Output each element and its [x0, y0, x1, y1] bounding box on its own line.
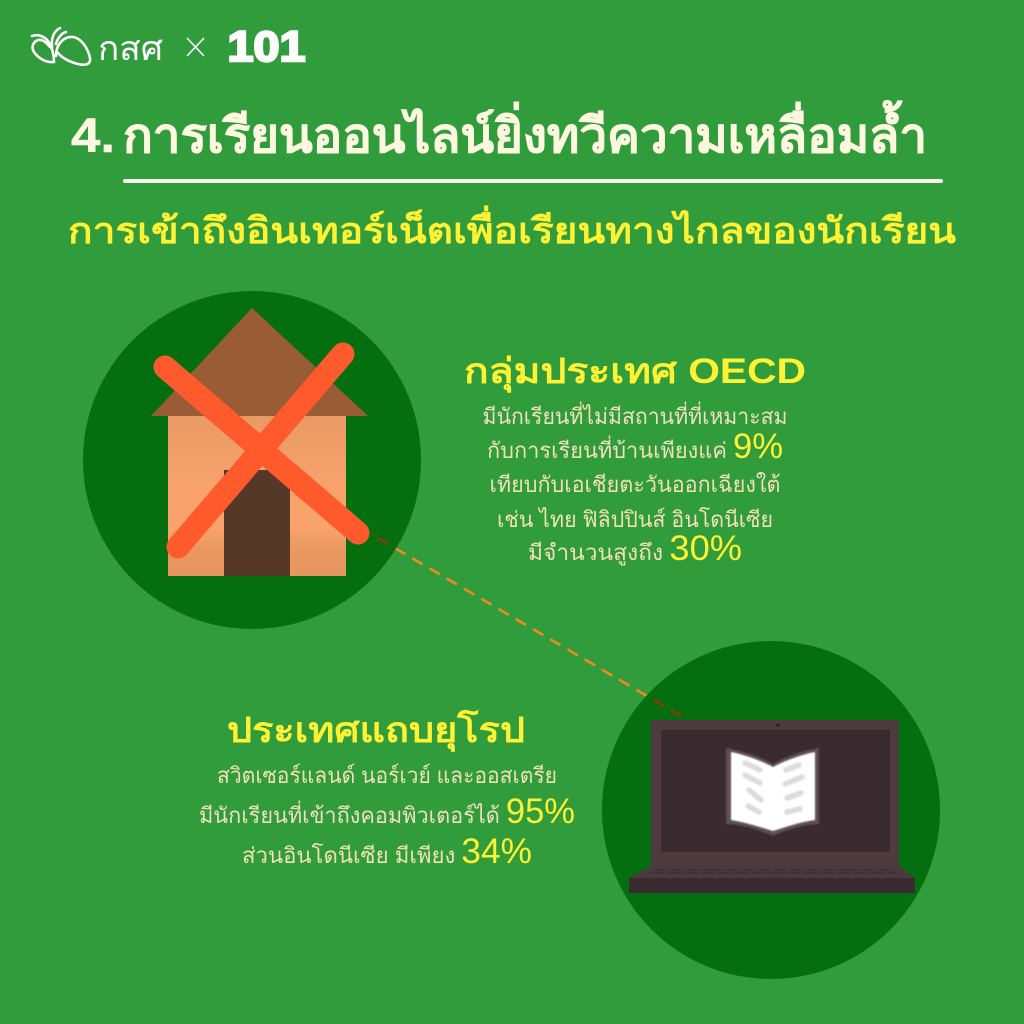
text block: OECD — [464, 352, 806, 568]
heading: OECD: กลุ่มประเทศ OECD — [464, 352, 806, 393]
logo text: กสศ — [98, 30, 163, 68]
logo: partner logos — [32, 23, 306, 71]
icon: times sign — [187, 38, 204, 56]
icon: red cross — [165, 354, 358, 547]
logo number 101: 101 — [228, 23, 306, 71]
body: OECD line 4: เช่น ไทย ฟิลิปปินส์ อินโดนีเซีย — [497, 507, 773, 532]
title number: 4. — [71, 110, 115, 163]
body: OECD line 2: กับการเรียนที่บ้านเพียงแค่ 9% — [487, 427, 783, 466]
icon: open book — [726, 748, 819, 836]
heading: Europe: ประเทศแถบยุโรป — [227, 709, 525, 752]
circle background — [602, 641, 940, 979]
title underline — [123, 179, 943, 183]
panel: laptop circle — [602, 641, 940, 979]
panel: house circle — [83, 291, 421, 629]
body: Europe line 3: ส่วนอินโดนีเซีย มีเพียง 34% — [242, 832, 532, 871]
title — [71, 100, 927, 163]
text block: Europe — [199, 709, 575, 871]
title text: การเรียนออนไลน์ยิ่งทวีความเหลื่อมล้ำ — [123, 100, 927, 163]
icon: leaf logo — [32, 28, 90, 65]
subtitle: การเข้าถึงอินเทอร์เน็ตเพื่อเรียนทางไกลของนักเรียน — [68, 205, 956, 251]
body: OECD line 1: มีนักเรียนที่ไม่มีสถานที่ที่เหมาะสม — [482, 401, 788, 429]
body: OECD line 5: มีจำนวนสูงถึง 30% — [528, 529, 742, 568]
body: Europe line 2: มีนักเรียนที่เข้าถึงคอมพิวเตอร์ได้ 95% — [199, 792, 575, 831]
circle background — [83, 291, 421, 629]
body: Europe line 1: สวิตเซอร์แลนด์ นอร์เวย์ และออสเตรีย — [217, 763, 557, 788]
dashed connector line — [378, 538, 688, 720]
icon: house — [151, 308, 368, 576]
body: OECD line 3: เทียบกับเอเชียตะวันออกเฉียงใต้ — [490, 472, 780, 497]
icon: laptop — [629, 720, 915, 893]
connector line inside circles — [378, 538, 688, 720]
